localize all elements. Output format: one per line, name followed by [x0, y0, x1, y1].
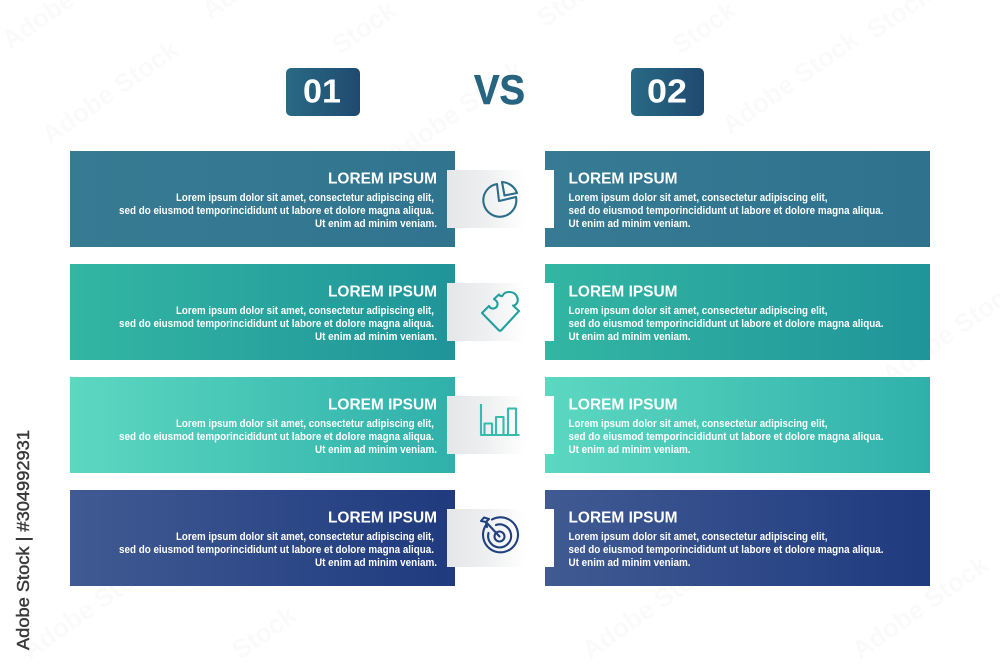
- badge 02: [631, 68, 704, 116]
- panel: row 4 left: LOREM IPSUM: [328, 510, 437, 526]
- icon tab: target with arrow: [447, 509, 525, 567]
- stock id caption: Adobe Stock | #304992931: [13, 430, 33, 650]
- panel: row 4 right: Ut enim ad minim veniam.: [568, 557, 691, 569]
- row 4: [70, 490, 930, 586]
- row 2: [70, 264, 930, 360]
- panel: row 3 left: sed do eiusmod temporincididunt ut labore et dolore magna aliqua.: [119, 431, 434, 443]
- panel: row 3 right: Ut enim ad minim veniam.: [568, 444, 691, 456]
- icon tab: puzzle piece: [447, 283, 525, 341]
- panel: row 1 left: Lorem ipsum dolor sit amet, consectetur adipiscing elit,: [176, 192, 434, 204]
- panel: row 1 left: sed do eiusmod temporincididunt ut labore et dolore magna aliqua.: [119, 205, 434, 217]
- panel: row 2 left: LOREM IPSUM: [328, 284, 437, 300]
- panel: row 2 right: Lorem ipsum dolor sit amet, consectetur adipiscing elit,: [568, 305, 828, 317]
- heading: VS: VS: [474, 66, 525, 113]
- panel: row 4 left: [70, 490, 455, 586]
- panel: row 1 right: Ut enim ad minim veniam.: [568, 218, 691, 230]
- panel: row 3 left: LOREM IPSUM: [328, 396, 437, 414]
- panel: row 2 left: [70, 264, 455, 360]
- panel: row 4 right: Lorem ipsum dolor sit amet, consectetur adipiscing elit,: [568, 531, 828, 543]
- row 3: [70, 377, 930, 473]
- panel: row 1 left: Ut enim ad minim veniam.: [315, 218, 437, 230]
- panel: row 2 right: Ut enim ad minim veniam.: [568, 331, 691, 343]
- panel: row 2 right: [545, 264, 930, 360]
- panel: row 2 left: Lorem ipsum dolor sit amet, consectetur adipiscing elit,: [176, 305, 434, 317]
- panel: row 1 right: [545, 151, 930, 247]
- badge 01: 01: [303, 74, 341, 110]
- panel: row 1 right: sed do eiusmod temporincididunt ut labore et dolore magna aliqua.: [568, 205, 884, 217]
- panel: row 4 left: sed do eiusmod temporincididunt ut labore et dolore magna aliqua.: [119, 544, 434, 556]
- panel: row 4 left: Ut enim ad minim veniam.: [315, 557, 437, 569]
- panel: row 1 right: Lorem ipsum dolor sit amet, consectetur adipiscing elit,: [568, 192, 828, 204]
- panel: row 3 left: [70, 377, 455, 473]
- panel: row 2 left: sed do eiusmod temporincididunt ut labore et dolore magna aliqua.: [119, 318, 434, 330]
- row 1: [70, 151, 930, 247]
- panel: row 4 left: Lorem ipsum dolor sit amet, consectetur adipiscing elit,: [176, 531, 434, 543]
- panel: row 3 right: [545, 377, 930, 473]
- panel: row 4 right: LOREM IPSUM: [568, 510, 678, 526]
- icon tab: pie chart: [447, 170, 525, 228]
- badge 01: [286, 68, 360, 116]
- panel: row 2 left: Ut enim ad minim veniam.: [315, 331, 437, 343]
- icon tab: bar chart: [447, 396, 525, 454]
- panel: row 2 right: LOREM IPSUM: [568, 284, 678, 300]
- panel: row 2 right: sed do eiusmod temporincididunt ut labore et dolore magna aliqua.: [568, 318, 884, 330]
- panel: row 3 left: Ut enim ad minim veniam.: [315, 444, 437, 456]
- panel: row 3 right: Lorem ipsum dolor sit amet, consectetur adipiscing elit,: [568, 418, 828, 430]
- panel: row 1 right: LOREM IPSUM: [568, 170, 678, 188]
- panel: row 4 right: [545, 490, 930, 586]
- panel: row 1 left: [70, 151, 455, 247]
- badge 02: 02: [647, 74, 687, 110]
- panel: row 3 left: Lorem ipsum dolor sit amet, consectetur adipiscing elit,: [176, 418, 434, 430]
- panel: row 3 right: LOREM IPSUM: [568, 396, 678, 414]
- panel: row 4 right: sed do eiusmod temporincididunt ut labore et dolore magna aliqua.: [568, 544, 884, 556]
- panel: row 1 left: LOREM IPSUM: [328, 170, 437, 188]
- panel: row 3 right: sed do eiusmod temporincididunt ut labore et dolore magna aliqua.: [568, 431, 884, 443]
